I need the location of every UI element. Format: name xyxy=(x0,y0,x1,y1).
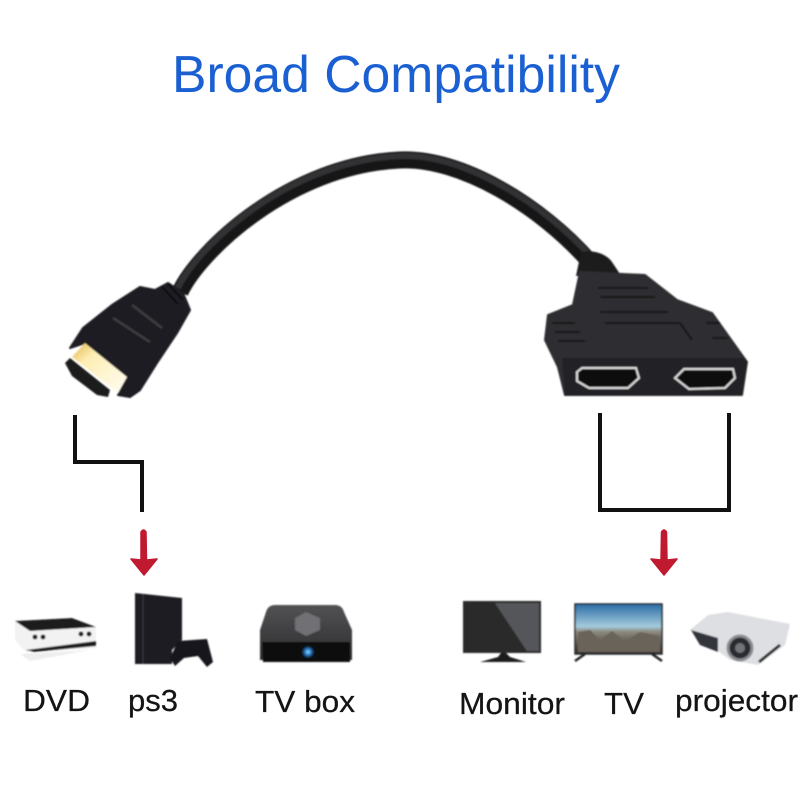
label: TV box: TV box xyxy=(255,684,355,719)
label: ps3: ps3 xyxy=(128,683,178,718)
HDMI port right xyxy=(675,369,735,389)
cable xyxy=(180,160,590,292)
label: projector: projector xyxy=(675,683,798,718)
splitter body xyxy=(545,272,747,395)
icon: DVD xyxy=(15,618,96,661)
icon: projector xyxy=(690,612,790,665)
arrow: right xyxy=(651,530,677,575)
HDMI splitter cable xyxy=(65,156,747,397)
HDMI male plug xyxy=(65,283,190,397)
icon: TV xyxy=(575,604,662,661)
HDMI port left xyxy=(577,368,639,388)
right connector bracket xyxy=(600,413,729,510)
label: DVD: DVD xyxy=(23,683,90,718)
label: Monitor: Monitor xyxy=(459,686,565,721)
icon: Monitor xyxy=(463,601,541,662)
strain relief xyxy=(576,251,620,276)
label: TV: TV xyxy=(604,686,644,721)
title: Broad Compatibility xyxy=(172,46,620,104)
icon: TV box xyxy=(260,605,352,662)
icon: ps3 xyxy=(135,593,213,667)
left connector line xyxy=(75,415,142,512)
arrow: left xyxy=(131,530,157,575)
